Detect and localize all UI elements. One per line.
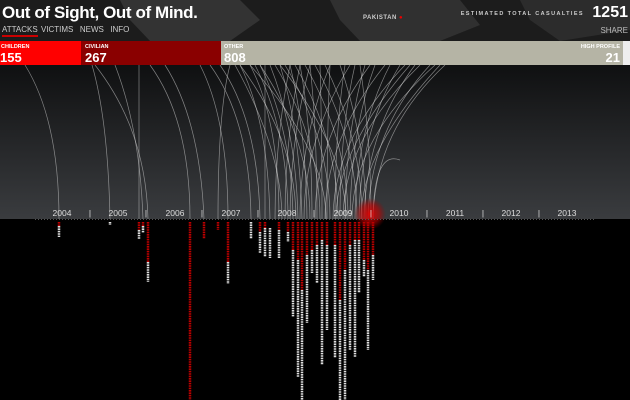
bar: children: CHILDREN — [1, 44, 29, 50]
year axis: 2012 — [502, 208, 521, 218]
bar: other: HIGH PROFILE — [581, 44, 620, 50]
year axis: | — [370, 208, 372, 218]
red glow marker — [354, 198, 386, 230]
year axis: | — [538, 208, 540, 218]
arcs — [25, 65, 445, 219]
bar: other: OTHER — [224, 44, 243, 50]
year axis: | — [482, 208, 484, 218]
map label: Pakistan: PAKISTAN ● — [363, 15, 403, 21]
year axis: | — [145, 208, 147, 218]
year axis: 2013 — [558, 208, 577, 218]
bar: children: 155 — [0, 50, 22, 65]
bar: civilian: 267 — [85, 50, 107, 65]
year axis: | — [89, 208, 91, 218]
year axis: 2005 — [109, 208, 128, 218]
share link: SHARE — [600, 26, 628, 35]
year axis: 2004 — [53, 208, 72, 218]
year axis: | — [201, 208, 203, 218]
year axis: | — [313, 208, 315, 218]
category bars — [0, 41, 630, 65]
bar: high profile — [623, 41, 630, 65]
year axis: 2009 — [334, 208, 353, 218]
year axis — [53, 208, 577, 218]
bar: other: 808 — [224, 50, 246, 65]
year axis: | — [257, 208, 259, 218]
bar: civilian — [81, 41, 221, 65]
year axis: 2008 — [278, 208, 297, 218]
year axis: 2011 — [446, 208, 464, 218]
year axis: 2006 — [166, 208, 185, 218]
total casualties: ESTIMATED TOTAL CASUALTIES — [461, 11, 584, 17]
bar: children — [0, 41, 81, 65]
bar: civilian: CIVILIAN — [85, 44, 109, 50]
timeline background — [0, 65, 630, 219]
year axis: 2007 — [222, 208, 241, 218]
bar: other: 21 — [606, 50, 620, 65]
bar: other — [221, 41, 623, 65]
casualty columns — [59, 222, 373, 400]
year axis: 2010 — [390, 208, 409, 218]
header background map — [0, 0, 630, 41]
total casualties — [461, 4, 628, 21]
total casualties: 1251 — [592, 4, 628, 21]
nav menu: ATTACKS VICTIMS NEWS INFO — [2, 25, 129, 34]
year axis: | — [426, 208, 428, 218]
title: Out of Sight, Out of Mind. — [2, 3, 197, 22]
